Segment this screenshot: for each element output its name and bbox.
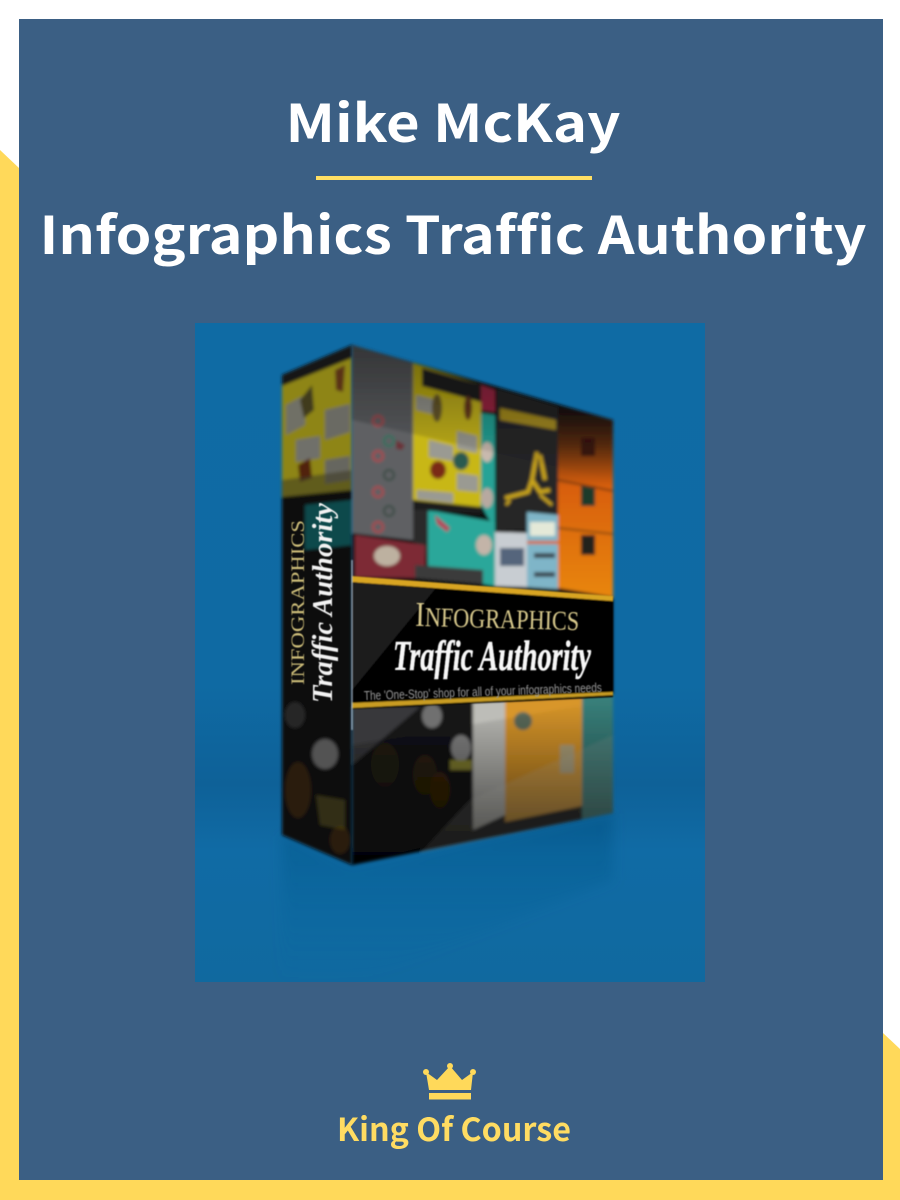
lower shading	[352, 700, 613, 865]
teal upper column	[481, 413, 495, 530]
spine title text	[288, 502, 339, 703]
lower teal panel	[582, 695, 613, 819]
brand name: King Of Course	[337, 1105, 571, 1151]
lower white column	[473, 701, 505, 830]
crown icon	[423, 1063, 476, 1100]
product image	[195, 323, 705, 982]
red tab	[481, 385, 495, 412]
band heading: INFOGRAPHICS	[415, 595, 580, 638]
flyer white	[495, 532, 527, 587]
dark runner panel	[497, 389, 558, 530]
box reflection	[282, 813, 613, 982]
dark label	[415, 565, 483, 584]
teal lower panel	[428, 510, 495, 586]
lower orange panel	[505, 697, 582, 822]
red panel	[355, 535, 425, 578]
yellow infographic	[413, 363, 481, 507]
spine highlight	[351, 560, 353, 730]
band tagline: The 'One-Stop' shop for all of your infographics needs	[364, 680, 602, 703]
title: author: Mike McKay	[286, 82, 621, 157]
dark strip under yellow panel	[413, 500, 481, 514]
band across front	[352, 576, 613, 709]
band script title: Traffic Authority	[393, 634, 591, 680]
lower dark infographic	[352, 702, 473, 865]
orange panel	[558, 407, 613, 597]
yellow divider	[316, 176, 592, 180]
top shade	[352, 345, 613, 480]
gray infographic	[352, 345, 413, 540]
flyer light blue	[527, 512, 558, 589]
product box	[282, 345, 613, 865]
spine title text: Traffic Authority	[308, 502, 339, 703]
spine title text: INFOGRAPHICS	[288, 520, 309, 685]
box front face	[352, 345, 613, 865]
title: course name: Infographics Traffic Authority	[40, 194, 867, 269]
box left face	[282, 345, 352, 865]
image background	[195, 323, 705, 982]
